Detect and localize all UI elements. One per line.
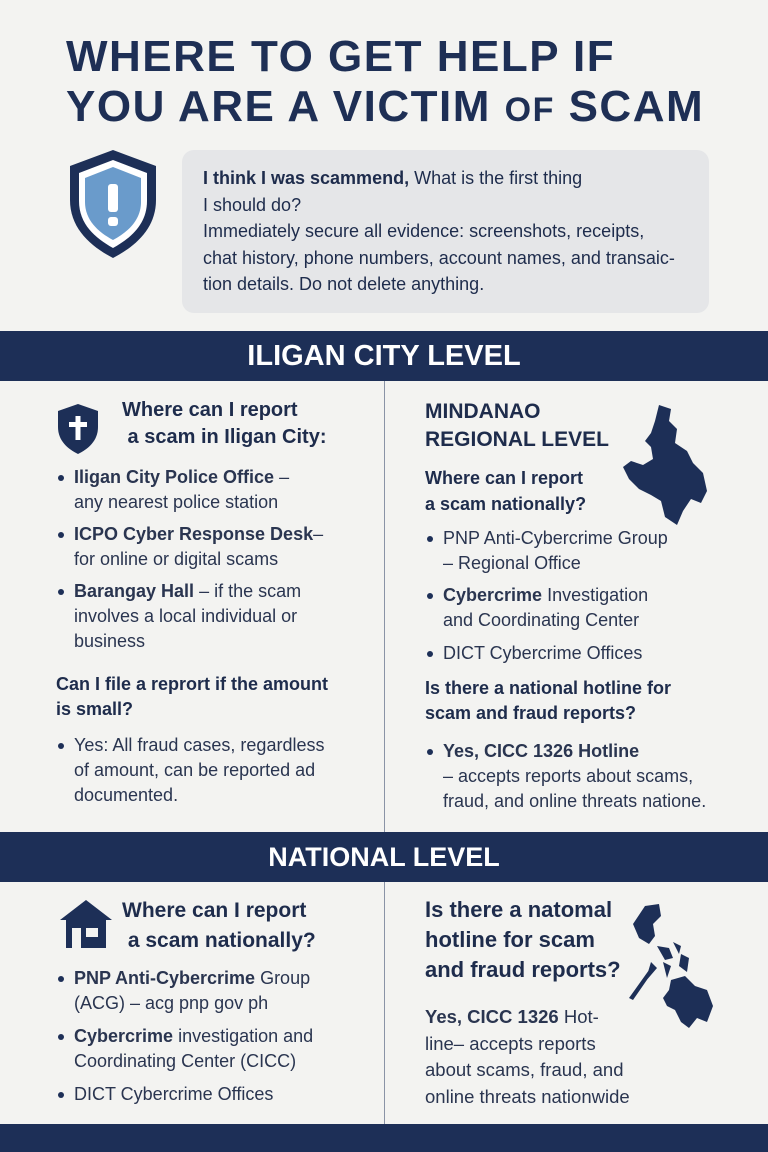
icon: mindanao map: [623, 405, 707, 525]
title: [66, 32, 704, 131]
callout: first thing to do: I think I was scammend, What is the first thing: [203, 168, 582, 188]
answer text: Yes, CICC 1326 Hot-: [425, 1006, 599, 1027]
list: national offices: Cybercrime investigation and: [74, 1026, 313, 1046]
list: regional offices: PNP Anti-Cybercrime Group: [443, 528, 668, 548]
question: Where can I report: [425, 468, 583, 488]
answer: – accepts reports about scams,: [443, 766, 693, 786]
list: regional offices: DICT Cybercrime Offices: [443, 643, 642, 663]
callout: first thing to do: tion details. Do not delete anything.: [203, 274, 484, 294]
banner: national level: [0, 832, 768, 882]
list: local offices: Barangay Hall – if the scam: [74, 581, 301, 601]
heading: [425, 400, 609, 451]
list: national offices: DICT Cybercrime Offices: [74, 1084, 273, 1104]
heading: a scam nationally?: [128, 929, 316, 952]
list: national offices: PNP Anti-Cybercrime Group: [74, 968, 310, 988]
list: national offices: Coordinating Center (CICC): [74, 1051, 296, 1071]
heading: Where can I report: [122, 399, 298, 421]
heading: a scam in Iligan City:: [128, 426, 327, 448]
answer: of amount, can be reported ad: [74, 760, 315, 780]
question: small amount: Can I file a reprort if the amount: [56, 674, 328, 694]
callout: first thing to do: [182, 150, 709, 313]
heading: [122, 899, 316, 952]
answer: [427, 741, 706, 811]
heading: [122, 399, 327, 448]
icon: shield warning: [70, 150, 156, 258]
banner: iligan city level: ILIGAN CITY LEVEL: [247, 340, 521, 372]
question: a scam nationally?: [425, 494, 586, 514]
list: local offices: involves a local individual or: [74, 606, 297, 626]
question: hotline: scam and fraud reports?: [425, 703, 636, 723]
heading: Is there a natomal: [425, 897, 612, 922]
callout: first thing to do: chat history, phone numbers, account names, and transaic-: [203, 248, 675, 268]
answer text: line– accepts reports: [425, 1032, 596, 1054]
callout: first thing to do: Immediately secure all evidence: screenshots, receipts,: [203, 221, 644, 241]
heading: and fraud reports?: [425, 957, 621, 982]
panel: national left: [58, 899, 316, 1104]
banner: national level: NATIONAL LEVEL: [268, 842, 500, 872]
panel: iligan city: [56, 399, 328, 805]
icon: shield cross: [58, 404, 98, 454]
question: hotline: [425, 678, 671, 723]
panel: mindanao regional: [425, 400, 707, 811]
answer text: online threats nationwide: [425, 1086, 630, 1106]
list: local offices: ICPO Cyber Response Desk–: [74, 524, 323, 544]
list: national offices: (ACG) – acg pnp gov ph: [74, 993, 268, 1013]
heading: hotline for scam: [425, 927, 595, 952]
list: regional offices: and Coordinating Center: [443, 610, 639, 630]
list: regional offices: Cybercrime Investigation: [443, 585, 648, 605]
heading: [425, 897, 621, 982]
callout: first thing to do: I should do?: [203, 194, 301, 214]
answer: [58, 735, 324, 805]
heading: MINDANAO: [425, 400, 540, 423]
answer text: [425, 1006, 630, 1106]
answer: documented.: [74, 785, 178, 805]
question: hotline: Is there a national hotline for: [425, 678, 671, 698]
title: YOU ARE A VICTIM OF SCAM: [66, 82, 704, 131]
list: national offices: [58, 968, 313, 1104]
list: regional offices: [427, 528, 668, 663]
answer: fraud, and online threats natione.: [443, 791, 706, 811]
heading: REGIONAL LEVEL: [425, 428, 609, 451]
question: small amount: is small?: [56, 699, 133, 719]
footer bar: [0, 1124, 768, 1152]
question: small amount: [56, 674, 328, 719]
icon: building: [60, 900, 112, 948]
list: local offices: for online or digital scams: [74, 549, 278, 569]
panel: national hotline: [425, 897, 713, 1106]
title: WHERE TO GET HELP IF: [66, 32, 615, 81]
list: local offices: business: [74, 631, 145, 651]
question: [425, 468, 586, 514]
list: regional offices: – Regional Office: [443, 553, 581, 573]
list: local offices: Iligan City Police Office –: [74, 467, 289, 487]
answer: Yes, CICC 1326 Hotline: [443, 741, 639, 761]
list: local offices: any nearest police station: [74, 492, 278, 512]
answer text: about scams, fraud, and: [425, 1059, 623, 1080]
banner: iligan city level: [0, 331, 768, 381]
icon: philippines map: [629, 904, 713, 1028]
heading: Where can I report: [122, 899, 306, 922]
answer: Yes: All fraud cases, regardless: [74, 735, 324, 755]
list: local offices: [58, 467, 324, 651]
